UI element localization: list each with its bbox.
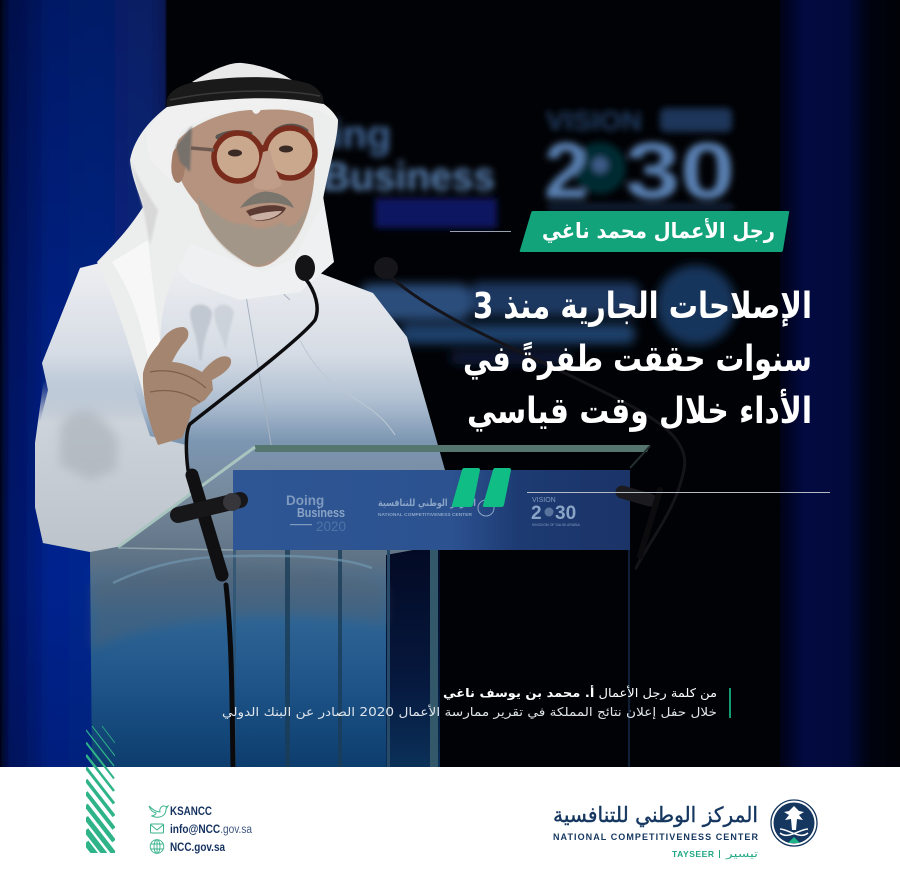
eyebrows: [218, 126, 306, 137]
glass top edge: [255, 445, 650, 452]
panel logo: national competitiveness center: [378, 498, 494, 518]
footer panel: [0, 767, 900, 896]
panel logo: vision 2030: 2: [531, 503, 542, 524]
quote mark: [452, 468, 511, 507]
microphone left: [178, 255, 317, 767]
tag: speaker name: [520, 211, 789, 252]
tayseer: TAYSEER: [672, 849, 714, 859]
stain reflections: [190, 304, 234, 360]
icon: twitter: [149, 806, 168, 817]
blurred stage screen: Vision 2030: VISION: [546, 106, 642, 136]
headline: الإصلاحات الجارية منذ 3: [473, 286, 812, 327]
logo emblem: [771, 800, 817, 846]
curtain vertical shading: [0, 0, 168, 767]
decorative rule: right of quote: [527, 492, 830, 493]
nose: [254, 150, 282, 190]
email: info@NCC.gov.sa: [170, 824, 253, 836]
panel logo: Doing Business 2020: 2020: [316, 519, 346, 534]
arabic name: المركز الوطني للتنافسية: [553, 803, 758, 827]
blue front panel: [233, 470, 630, 550]
logo: national competitiveness center: تيسير: [725, 849, 758, 860]
glass base rim: [113, 556, 372, 583]
blurred stage screen: Doing Business: Business: [322, 155, 495, 199]
headline: الأداء خلال وقت قياسي: [467, 388, 812, 432]
drape shading: [112, 240, 160, 358]
moustache: [240, 192, 294, 208]
eyes: [228, 150, 242, 156]
blurred stage screen: Vision 2030: 2: [544, 126, 588, 215]
collar: [185, 197, 334, 300]
blurred stage screen: Doing Business: Doing: [278, 113, 391, 157]
panel logo: Doing Business 2020: Doing: [286, 493, 324, 508]
sleeve shadow: [60, 411, 118, 480]
blurred stage screen: Doing Business: [324, 114, 502, 232]
panel logo: national competitiveness center: المركز الوطني للتنافسية: [378, 498, 476, 509]
panel logo: vision 2030: VISION: [532, 497, 556, 504]
blurred stage screen: Vision 2030: 30: [625, 126, 735, 215]
hand: [143, 327, 231, 445]
blurred stage screen: Vision 2030: [544, 106, 735, 215]
glasses: [191, 128, 315, 181]
website: NCC.gov.sa: [170, 842, 226, 854]
decorative stripes: [86, 726, 115, 878]
attribution: [222, 685, 731, 720]
face: [171, 109, 315, 267]
headline: [463, 286, 812, 432]
attribution: من كلمة رجل الأعمال أ. محمد بن يوسف ناغي: [443, 685, 717, 701]
ghutra top: [192, 62, 292, 82]
ghutra front fold: [171, 98, 338, 171]
panel logo: national competitiveness center: NATIONAL COMPETITIVENESS CENTER: [378, 512, 473, 518]
icon: mail: [150, 824, 164, 833]
podium lower shadow: [92, 568, 386, 650]
ear and hair: [171, 147, 185, 183]
person: [35, 63, 445, 767]
handle: KSANCC: [170, 806, 212, 818]
left sleeve: [35, 382, 190, 552]
logo: national competitiveness center: [553, 800, 817, 860]
panel logo: Doing Business 2020: Business: [297, 505, 345, 520]
english name: NATIONAL COMPETITIVENESS CENTER: [553, 832, 758, 842]
microphone right: [374, 257, 685, 568]
panel logo: vision 2030: [531, 497, 581, 527]
podium legs: [233, 550, 630, 767]
headdress drape: [97, 98, 338, 400]
navy area behind podium: [385, 548, 440, 767]
panel logo: vision 2030: 30: [555, 503, 576, 524]
mouth: [246, 205, 286, 221]
decorative rule: left of tag: [450, 231, 511, 232]
tag: speaker name: رجل الأعمال محمد ناغي: [542, 217, 775, 243]
podium: [113, 445, 650, 767]
right blue curtain: [780, 0, 878, 767]
icon: globe: [150, 840, 164, 853]
panel logo: vision 2030: KINGDOM OF SAUDI ARABIA: [532, 523, 581, 527]
agal: [167, 77, 323, 107]
blurred stage screen: lower logos: [360, 265, 736, 364]
beard: [198, 198, 312, 268]
attribution: خلال حفل إعلان نتائج المملكة في تقرير ممارسة الأعمال 2020 الصادر عن البنك الدولي: [222, 704, 717, 720]
headline: سنوات حققت طفرةً في: [463, 339, 812, 380]
left blue curtain: [0, 0, 166, 777]
shirt details: [246, 294, 396, 445]
panel logo: Doing Business 2020: [286, 495, 346, 531]
thobe body: [35, 250, 445, 767]
contact list: [149, 806, 253, 854]
